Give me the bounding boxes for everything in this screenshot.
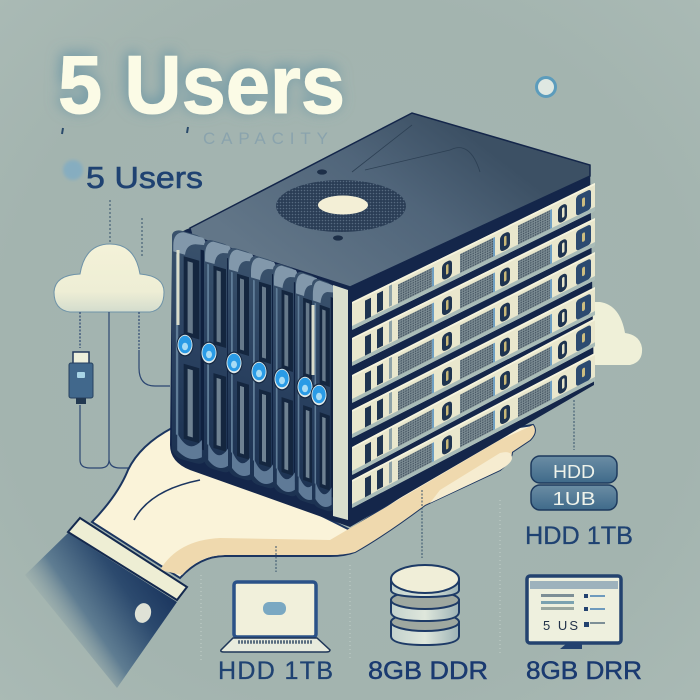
server <box>170 113 595 527</box>
palm shading <box>160 425 535 575</box>
screws <box>317 169 343 241</box>
icon: USB plug <box>69 352 93 404</box>
icon: database stack <box>391 565 459 645</box>
dotted connectors above cloud <box>110 200 142 258</box>
dotted connectors to icons <box>276 400 574 572</box>
light edge strips on bays <box>178 250 313 375</box>
secondary heading: 5 Users: 5 Users <box>86 160 203 195</box>
callout: HDD 1UB pills <box>531 456 617 510</box>
label: HDD 1TB: HDD 1TB <box>218 657 333 685</box>
subtitle: capacity <box>62 127 328 148</box>
sleeve <box>25 533 177 688</box>
subtitle: capacity: CAPACITY <box>203 129 328 148</box>
label: 8GB DDR: 8GB DDR <box>368 657 488 685</box>
server top face <box>190 113 590 287</box>
title: 5 Users: 5 Users <box>58 38 345 131</box>
callout: HDD 1UB pills: 1UB <box>552 489 596 509</box>
icon: laptop <box>221 582 330 652</box>
icon: ring at top right <box>536 78 556 96</box>
icon: monitor <box>527 576 621 649</box>
cuff button <box>133 601 153 625</box>
speaker grille <box>276 180 406 232</box>
top face seam <box>352 125 480 172</box>
cables from cloud <box>80 312 170 468</box>
blue status LEDs <box>176 334 328 406</box>
thumb <box>430 452 512 503</box>
front corner strip <box>333 285 348 520</box>
server body silhouette <box>170 113 594 527</box>
icon: left cloud <box>54 244 164 312</box>
shirt cuff <box>68 518 187 600</box>
icon: monitor: 5 US <box>543 618 578 633</box>
callout: HDD 1UB pills: HDD <box>553 462 595 482</box>
label: HDD 1TB right: HDD 1TB <box>525 522 633 550</box>
front drive bays <box>172 228 334 513</box>
icon: right cloud <box>585 302 642 365</box>
label: 8GB DRR: 8GB DRR <box>526 657 642 685</box>
palm crease <box>134 480 200 520</box>
hand <box>92 425 535 578</box>
side drive trays <box>352 183 595 508</box>
